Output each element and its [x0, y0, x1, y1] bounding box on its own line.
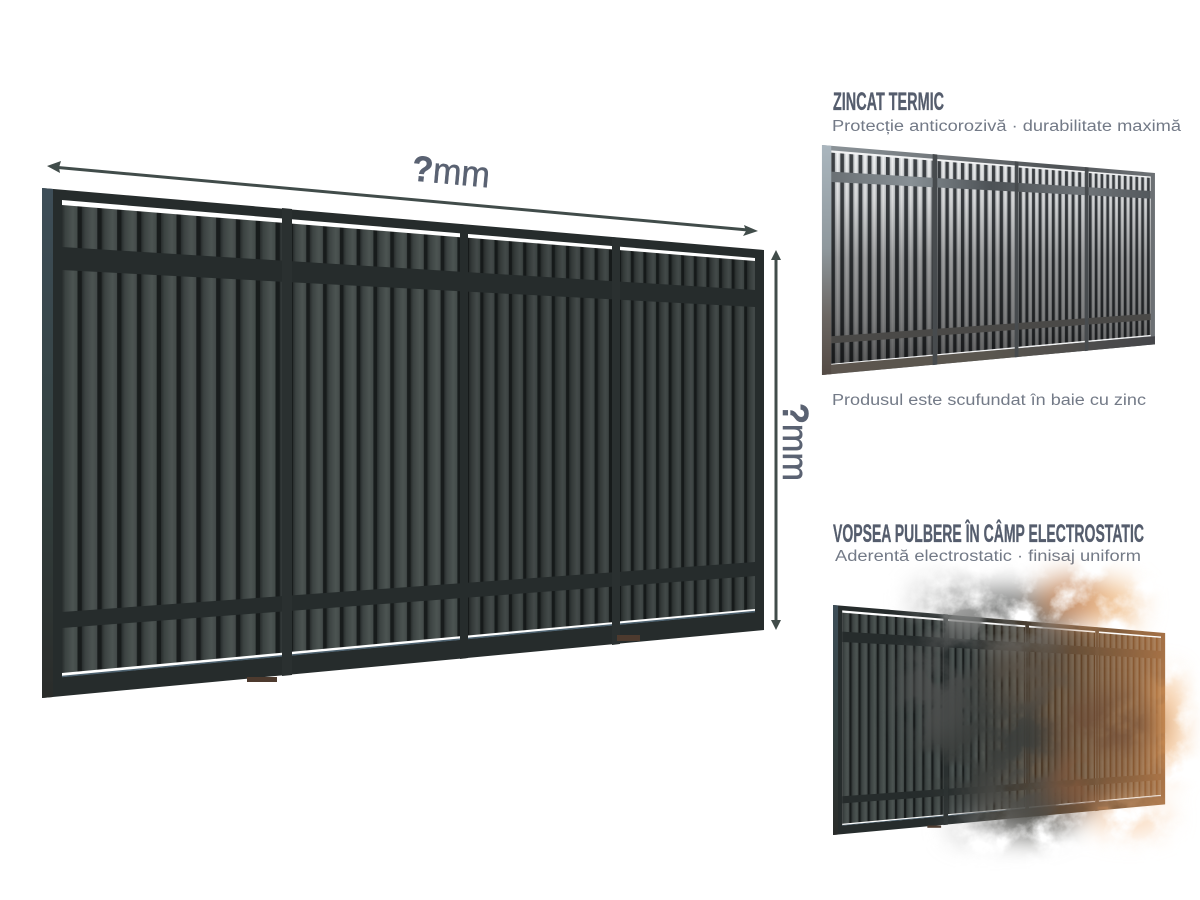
galvanized opening: [831, 150, 1151, 366]
slats panel 2: [292, 224, 460, 652]
smoke cloud: [900, 576, 1180, 842]
slats panel 1: [62, 205, 282, 673]
orange tint: [970, 600, 1166, 840]
height label: ? mm: [775, 403, 816, 481]
width label: ?mm: [410, 147, 492, 196]
mullion 1: [282, 208, 292, 676]
galvanized bottom frame: [822, 336, 1155, 375]
main fence: [42, 188, 764, 698]
orange smoke: [1036, 576, 1180, 834]
hinge tab 2: [617, 635, 640, 641]
subtitle: zincat: Protecție anticorozivă · durabilitate maximă: [832, 118, 1181, 135]
galvanized lower rail: [831, 314, 1151, 343]
galvanized mullion 3: [1085, 167, 1089, 351]
hinge tab 1: [247, 677, 277, 682]
caption: zincat: Produsul este scufundat în baie cu zinc: [832, 392, 1146, 409]
galvanized fence: [822, 145, 1155, 375]
upper rail: [62, 247, 755, 307]
slats panel 4: [620, 250, 755, 621]
mullion 3: [612, 237, 620, 645]
galvanized left post: [822, 145, 831, 375]
galvanized upper rail: [831, 172, 1151, 199]
lower rail: [62, 562, 755, 628]
galvanized slats panel 1: [831, 153, 933, 364]
powder coated fence: [833, 605, 1165, 835]
heading: zincat termic: ZINCAT TERMIC: [833, 88, 944, 116]
galvanized slats panel 4: [1089, 173, 1151, 340]
width dimension arrow: [47, 161, 758, 236]
galvanized slats panel 2: [937, 161, 1015, 354]
galvanized frame: [822, 145, 1155, 375]
galvanized mullion 1: [933, 154, 937, 365]
subtitle: vopsea: Aderentă electrostatic · finisaj uniform: [835, 548, 1141, 565]
bottom frame inner edge: [62, 612, 755, 676]
grey smoke: [900, 580, 1080, 842]
galvanized slats panel 3: [1018, 167, 1085, 347]
left post face: [42, 188, 53, 698]
height dimension arrow: [771, 250, 781, 630]
galvanized mullion 2: [1015, 161, 1018, 357]
mullion 2: [460, 224, 468, 659]
slats panel 3: [468, 238, 612, 636]
fence frame: [42, 188, 764, 698]
frame opening: [62, 200, 755, 677]
vertical shading: [831, 153, 1151, 364]
